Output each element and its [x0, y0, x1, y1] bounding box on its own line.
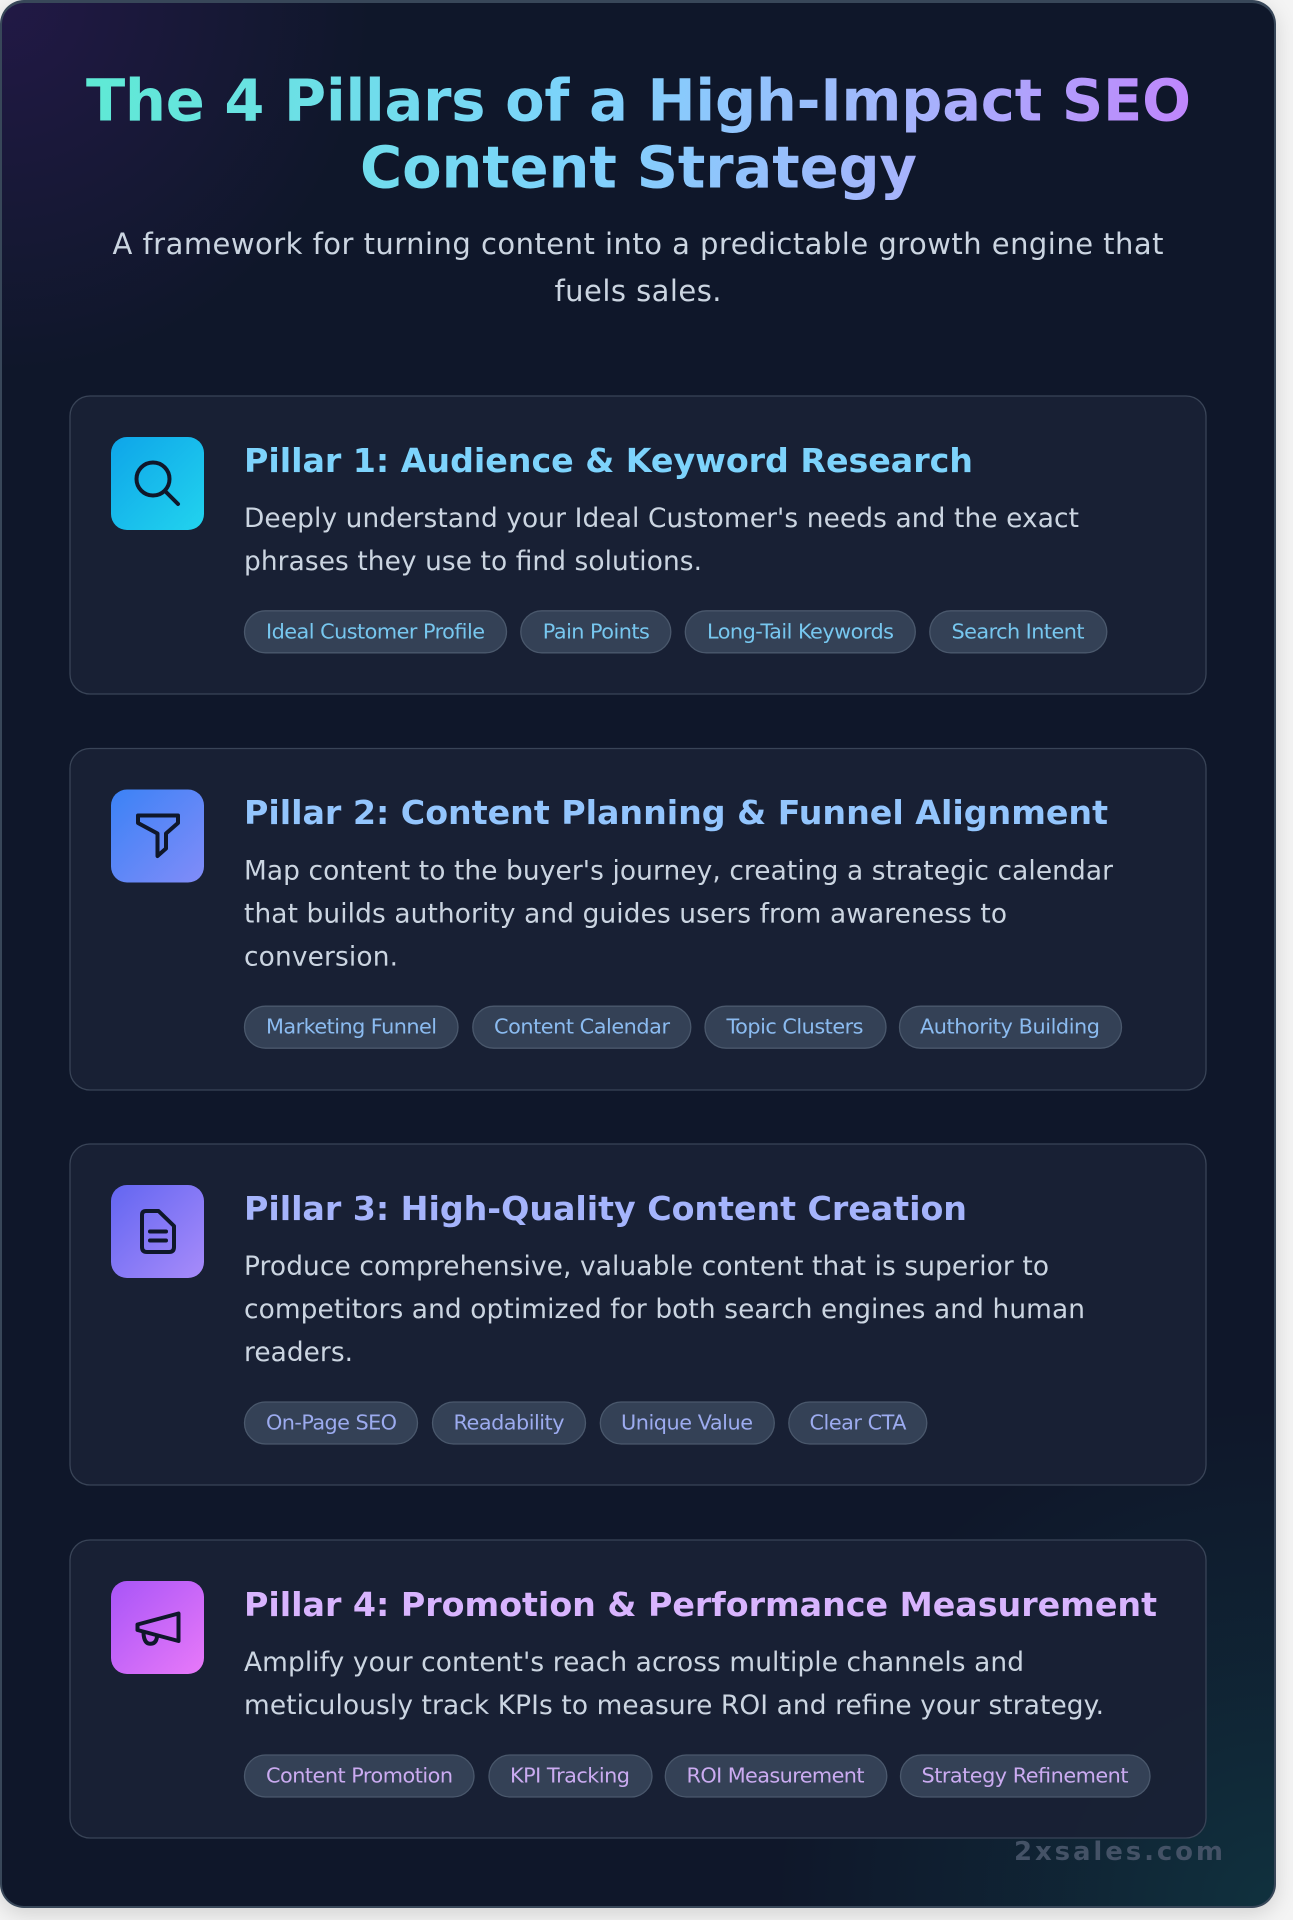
- panel: pillar 3: [70, 1144, 1206, 1485]
- tags: pillar 3: Readability: [454, 1410, 564, 1434]
- icon: magnifying glass: [111, 437, 204, 530]
- heading: pillar 3: Pillar 3: High-Quality Content Creation: [244, 1189, 967, 1228]
- panel: pillar 2: [70, 748, 1206, 1090]
- tags: pillar 4: [244, 1755, 1150, 1797]
- subtitle: [112, 227, 1164, 308]
- tags: pillar 4: Strategy Refinement: [922, 1764, 1128, 1788]
- tags: pillar 2: Marketing Funnel: [266, 1015, 437, 1039]
- tags: pillar 1: Search Intent: [952, 619, 1084, 643]
- title: [86, 68, 1191, 202]
- tags: pillar 3: Unique Value: [621, 1410, 753, 1434]
- description: pillar 2: Map content to the buyer's journey, creating a strategic calendar: [244, 855, 1113, 886]
- description: pillar 1: Deeply understand your Ideal Customer's needs and the exact: [244, 503, 1079, 534]
- description: pillar 3: Produce comprehensive, valuable content that is superior to: [244, 1251, 1049, 1282]
- heading: pillar 4: Pillar 4: Promotion & Performance Measurement: [244, 1585, 1157, 1624]
- title: Content Strategy: [360, 134, 917, 202]
- tags: pillar 2: [244, 1006, 1122, 1048]
- description: pillar 2: that builds authority and guides users from awareness to: [244, 898, 1007, 930]
- tags: pillar 1: [244, 611, 1107, 653]
- subtitle: fuels sales.: [554, 274, 722, 308]
- tags: pillar 2: Topic Clusters: [726, 1015, 864, 1039]
- tags: pillar 4: ROI Measurement: [686, 1764, 864, 1788]
- watermark: 2xsales.com: [1014, 1837, 1223, 1867]
- description: pillar 1: [244, 503, 1079, 577]
- tags: pillar 2: Content Calendar: [494, 1015, 670, 1039]
- description: pillar 4: Amplify your content's reach across multiple channels and: [244, 1647, 1024, 1678]
- tags: pillar 3: [244, 1402, 927, 1444]
- panel: pillar 1: [70, 396, 1206, 694]
- description: pillar 3: readers.: [244, 1337, 353, 1368]
- heading: pillar 1: Pillar 1: Audience & Keyword Research: [244, 441, 973, 480]
- tags: pillar 2: Authority Building: [920, 1015, 1100, 1039]
- icon: funnel: [111, 790, 204, 882]
- tags: pillar 1: Ideal Customer Profile: [266, 619, 485, 643]
- icon: megaphone: [111, 1581, 204, 1674]
- heading: pillar 2: Pillar 2: Content Planning & Funnel Alignment: [244, 793, 1108, 832]
- tags: pillar 4: KPI Tracking: [510, 1764, 630, 1788]
- description: pillar 4: meticulously track KPIs to measure ROI and refine your strategy.: [244, 1690, 1104, 1721]
- tags: pillar 4: Content Promotion: [266, 1764, 453, 1788]
- icon: document: [111, 1185, 204, 1278]
- tags: pillar 1: Pain Points: [543, 619, 650, 643]
- description: pillar 2: conversion.: [244, 942, 398, 973]
- title: The 4 Pillars of a High-Impact SEO: [86, 68, 1191, 135]
- subtitle: A framework for turning content into a predictable growth engine that: [112, 227, 1164, 261]
- description: pillar 3: [244, 1251, 1085, 1368]
- tags: pillar 3: Clear CTA: [810, 1410, 907, 1434]
- panel: pillar 4: [70, 1540, 1206, 1838]
- description: pillar 2: [244, 855, 1113, 973]
- description: pillar 1: phrases they use to find solutions.: [244, 546, 702, 577]
- description: pillar 3: competitors and optimized for both search engines and human: [244, 1294, 1085, 1325]
- tags: pillar 1: Long-Tail Keywords: [707, 619, 894, 643]
- tags: pillar 3: On-Page SEO: [266, 1410, 397, 1434]
- description: pillar 4: [244, 1647, 1104, 1721]
